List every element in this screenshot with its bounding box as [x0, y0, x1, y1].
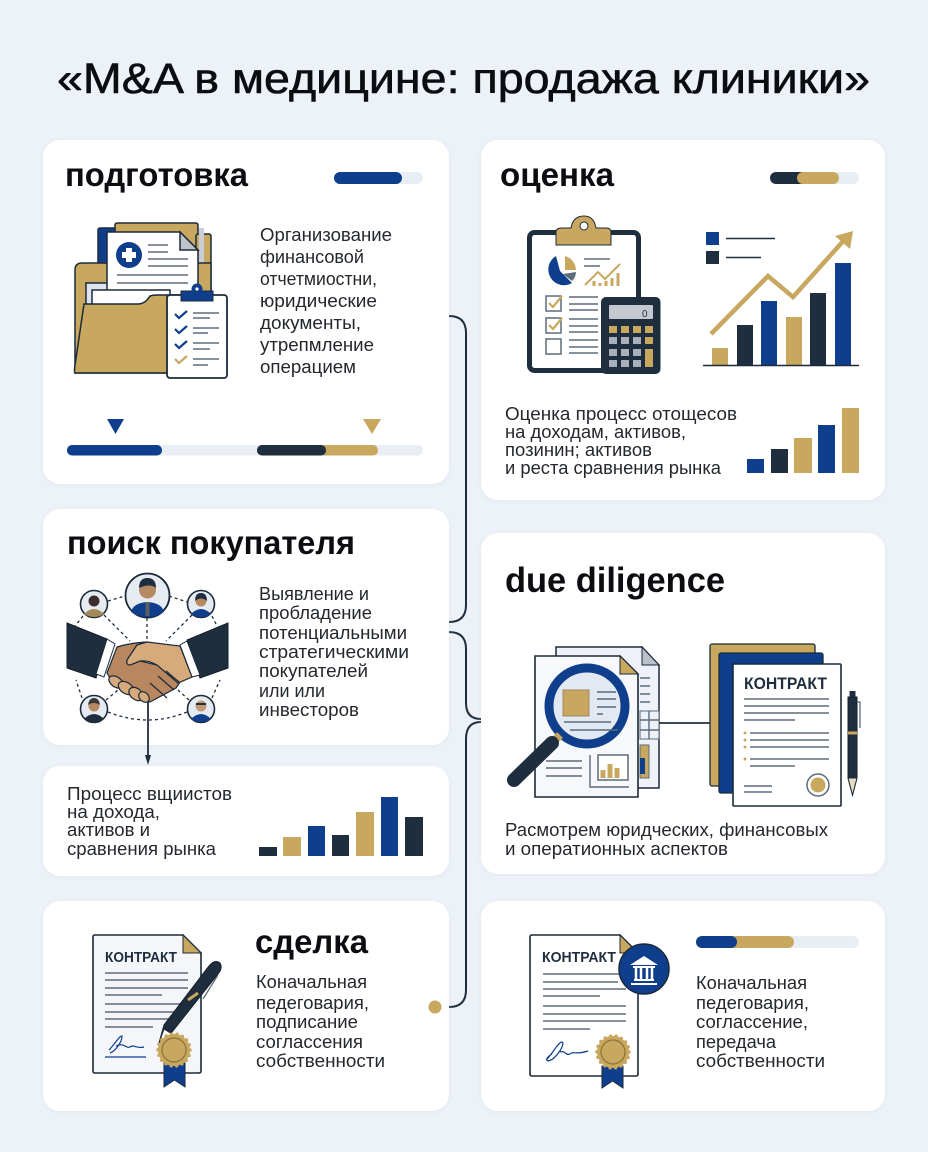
text: передача description: передача [696, 1031, 777, 1052]
icon: documents with magnifier [514, 647, 659, 797]
text: due diligence description: и оператионных аспектов [505, 839, 728, 859]
chart: growth bars with arrow [703, 231, 859, 366]
text: поиск покупателя description: проблaдение [259, 602, 372, 623]
icon: contract with pen and seal [93, 935, 221, 1087]
chart: small bars [747, 408, 859, 473]
text: сделка description: согласcения [256, 1031, 363, 1052]
arrow: down to next panel [145, 702, 151, 765]
icon: contract with bank badge and seal: КОНТРАКТ [542, 949, 616, 966]
progress bar top [770, 172, 859, 184]
text: процесс description: активов и [67, 820, 150, 840]
panel: процесс и рынок [43, 766, 449, 876]
icon: contract with pen and seal: КОНТРАКТ [105, 949, 177, 966]
icon: bank badge [619, 944, 669, 994]
sleeves and cuffs [67, 623, 228, 678]
text: due diligence description [505, 820, 828, 859]
text: подготовка description: Организование [260, 224, 392, 245]
text: подготовка description: утрепмление [260, 334, 374, 355]
icon: network of people and handshake [67, 574, 228, 722]
text: подготовка description: финансовой [260, 246, 364, 267]
panel: подготовка [43, 140, 449, 484]
text: поиск покупателя description: потенциальными [259, 622, 407, 643]
text: оценка description: на доходам, активов, [505, 422, 686, 442]
icon: contract stack: КОНТРАКТ [744, 675, 827, 693]
link between documents and contract [659, 722, 710, 724]
text: поиск покупателя description [259, 583, 409, 720]
progress bar top [334, 172, 423, 184]
text: подготовка description: документы, [260, 312, 361, 333]
panel: сделка [43, 901, 449, 1111]
icon: pen [848, 691, 860, 795]
marker triangles [107, 419, 381, 434]
text: передача description: собственности [696, 1050, 825, 1071]
connector lines between panels [436, 316, 481, 1007]
text: подготовка description [260, 224, 392, 377]
text: оценка description: и реста сравнения рынка [505, 458, 722, 478]
progress bar [696, 936, 859, 948]
text: сделка description: Коначальная [256, 971, 367, 992]
text: сделка description: подписание [256, 1011, 358, 1032]
timeline bar [67, 445, 423, 456]
text: due diligence description: Расмотрем юридческих, финансовых [505, 820, 828, 840]
text: процесс description: Процесс вщиистов [67, 784, 232, 804]
text: подготовка description: операцием [260, 356, 356, 377]
heading: подготовка: подготовка [65, 156, 249, 193]
icon: contract with bank badge and seal [530, 935, 669, 1088]
text: подготовка description: отчетмиостни, [260, 268, 377, 289]
text: оценка description: позинин; активов [505, 440, 652, 460]
gold connector dot [428, 1000, 442, 1014]
text: поиск покупателя description: покупателей [259, 660, 368, 681]
hands [107, 642, 192, 704]
panel: передача собственности [481, 901, 885, 1111]
icon: clipboard with calculator: 0 [642, 309, 648, 320]
text: сделка description [256, 971, 385, 1071]
text: оценка description [505, 404, 737, 478]
person circles [80, 574, 214, 722]
text: поиск покупателя description: Выявление и [259, 583, 369, 604]
text: передача description [696, 972, 825, 1071]
text: передача description: Коначальная [696, 972, 807, 993]
icon: folder with documents and checklist [74, 223, 227, 378]
text: передача description: педеговария, [696, 992, 809, 1013]
heading: due diligence: due diligence [505, 561, 725, 600]
text: оценка description: Оценка процесс отощесов [505, 404, 737, 424]
text: подготовка description: юридические [260, 290, 377, 311]
heading: оценка: оценка [500, 156, 615, 193]
text: процесс description: на дохода, [67, 802, 160, 822]
text: передача description: согласcение, [696, 1011, 808, 1032]
heading: поиск покупателя: поиск покупателя [67, 524, 355, 561]
chart: bars [259, 797, 423, 856]
heading: сделка: сделка [255, 923, 369, 960]
text: поиск покупателя description: или или [259, 680, 325, 701]
icon: contract stack [710, 644, 841, 806]
text: поиск покупателя description: инвесторов [259, 699, 359, 720]
panel: оценка [481, 140, 885, 500]
text: процесс description: сравнения рынка [67, 839, 217, 859]
text: поиск покупателя description: стратегическими [259, 641, 409, 662]
text: сделка description: собственности [256, 1050, 385, 1071]
text: процесс description [67, 784, 232, 859]
title: «M&A в медицине: продажа клиники» [57, 55, 870, 103]
panel: поиск покупателя [43, 509, 449, 765]
text: сделка description: педеговария, [256, 992, 369, 1013]
panel: due diligence [481, 533, 885, 874]
icon: clipboard with calculator [530, 216, 660, 374]
